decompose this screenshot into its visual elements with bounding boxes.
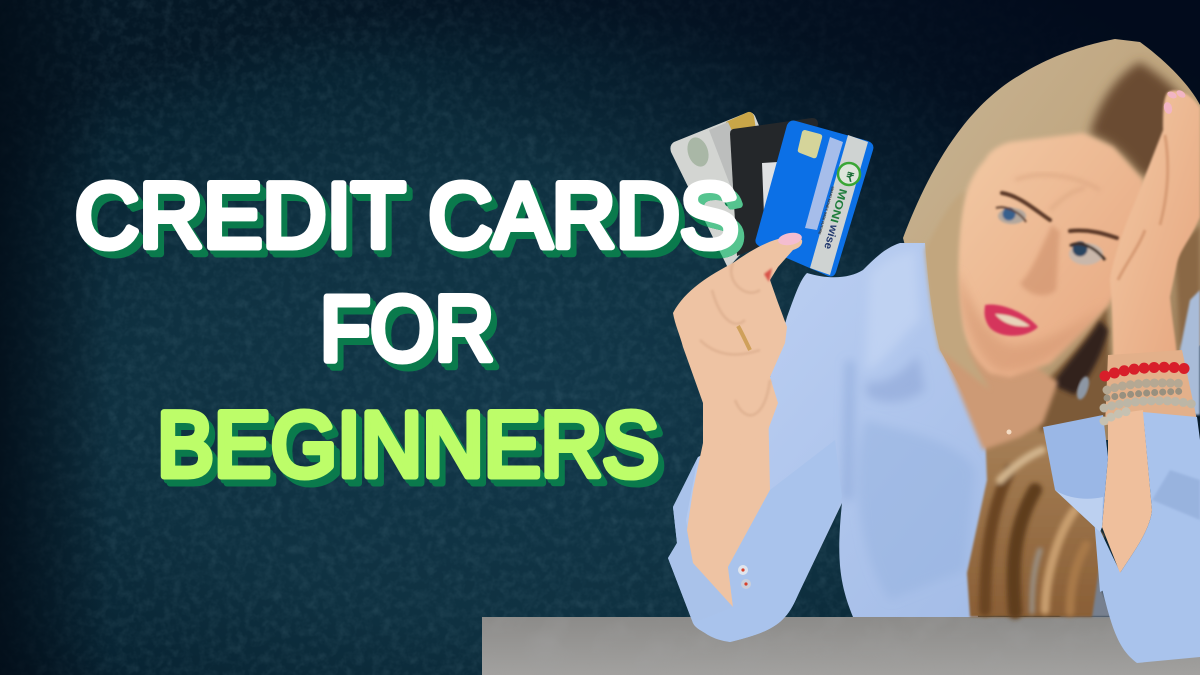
card logo [838,163,860,185]
black card [730,118,818,256]
grey shirt patch behind hair [1060,530,1113,617]
sleeve filler beside elbow crease [1094,518,1124,592]
fingernail [777,231,803,247]
blue card: wise [821,222,840,251]
earring reflection [1075,375,1091,401]
cuff buttons [738,565,751,589]
right cuff underside [1055,490,1103,532]
eyes [996,207,1105,265]
sleeve fold [1152,470,1200,520]
hair dark right [1175,225,1200,345]
white card [670,112,790,268]
neck pendant [1006,430,1012,434]
dark hair shadow [1052,320,1108,395]
title line: for: FOR [323,282,497,384]
title line: for: FOR [320,278,494,380]
title line: credit cards: CREDIT CARDS [81,172,745,274]
left hair strand beside face [925,190,990,390]
title: credit cards for beginners [75,165,745,503]
knuckle shading [700,263,770,415]
hair beside neck [1035,305,1112,432]
hand on head [1110,91,1200,363]
neck [940,345,1058,450]
eyebrows [1002,193,1117,238]
blue card: ₹ [844,169,856,185]
title line: for: FOR [326,285,500,387]
title line: credit cards: CREDIT CARDS [81,172,745,274]
hologram stripe [805,137,843,230]
forehead wrinkles [1015,175,1100,210]
shirt body and left sleeve [668,243,998,642]
right cuff [1043,415,1108,532]
left forearm [687,400,770,607]
left cuff inner [668,457,733,623]
bracelets [1104,367,1196,421]
nose shade [1020,225,1060,295]
mouth [984,304,1038,336]
title line: credit cards: CREDIT CARDS [78,169,742,271]
table top [482,617,1200,675]
hair dark parting [1090,62,1190,180]
title line: beginners: BEGINNERS [157,394,659,496]
holding hand [673,231,803,447]
shirt shading: seam, collar shadow, body [843,250,975,600]
hair back [903,39,1200,440]
red nail reflection [764,268,772,282]
face [956,133,1150,377]
cheek shade [957,270,1105,372]
credit cards fan [670,112,873,276]
title line: credit cards: CREDIT CARDS [75,165,739,267]
wrist behind bracelets [1105,350,1197,425]
card brand text: MONI [827,187,849,224]
long hair lower [967,410,1104,617]
woman: frustrated person holding the cards [668,39,1200,663]
left lower sleeve [693,440,842,642]
shirt patch right of wrist [1178,290,1200,415]
right sleeve [1100,412,1200,663]
blue card: SMART MONEY, WISE FUTURE [817,186,835,236]
chip [798,130,822,158]
finger separations [1118,135,1168,280]
title line: beginners: BEGINNERS [160,398,662,500]
right forearm skin [1102,410,1152,573]
blue card [755,120,873,276]
silver signature band [810,135,868,275]
title line: beginners: BEGINNERS [163,401,665,503]
fingernails [1163,89,1187,115]
ring [738,326,750,350]
